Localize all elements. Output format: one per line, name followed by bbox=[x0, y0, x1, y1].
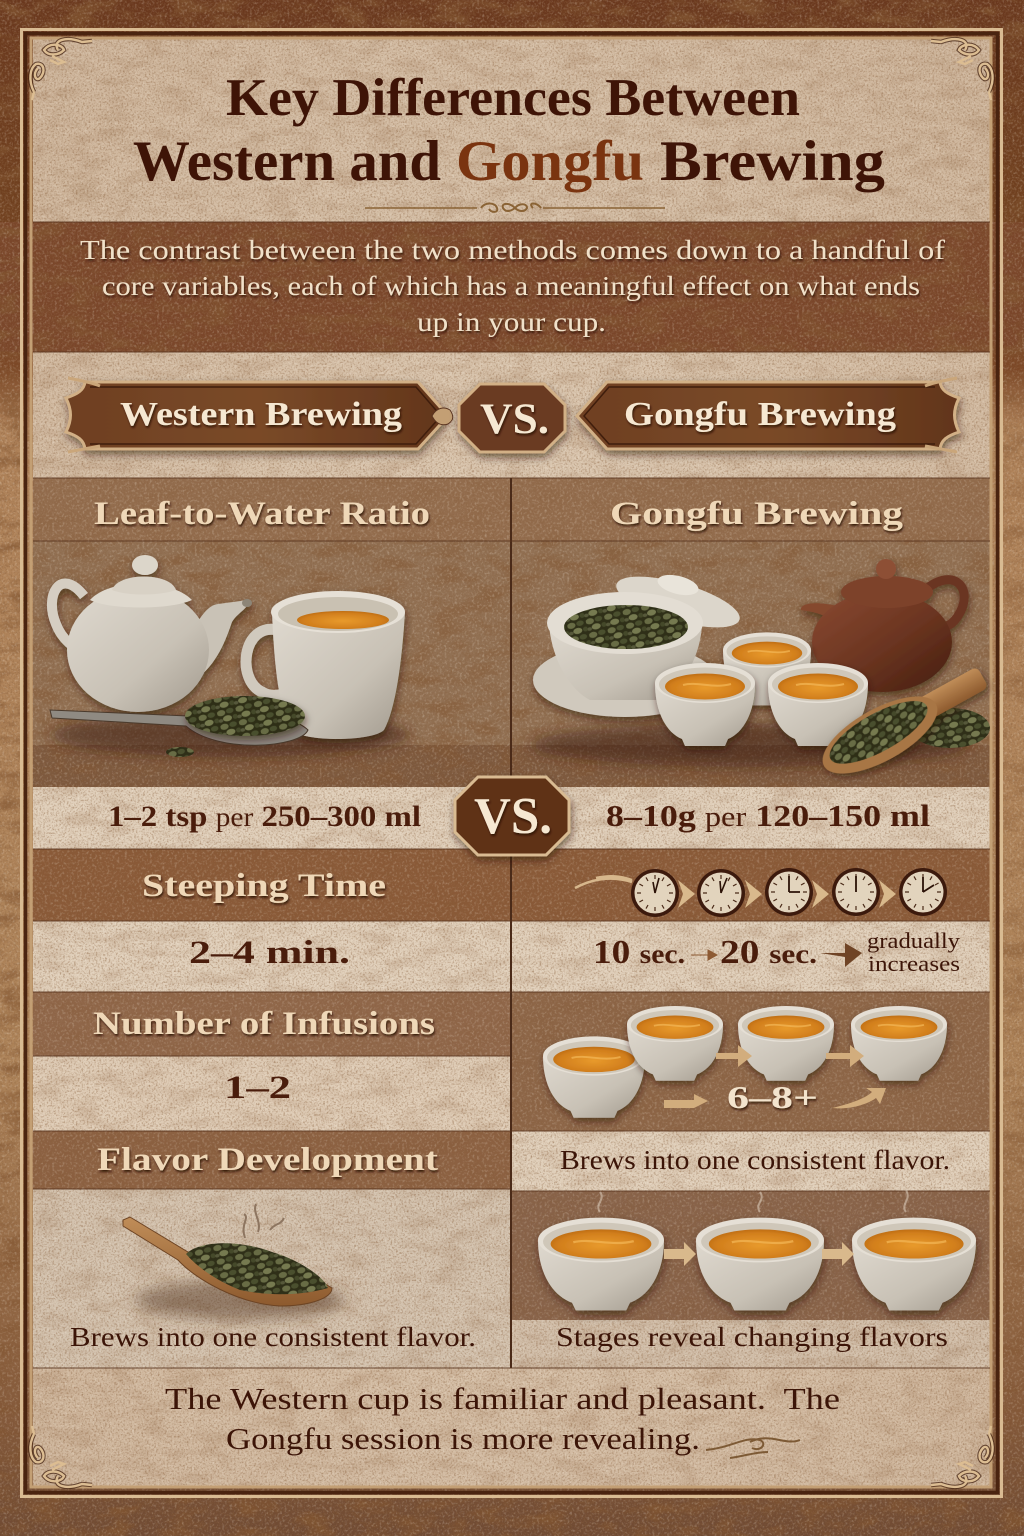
value: Western steeping time: 2–4 min. bbox=[189, 935, 350, 971]
panel: intro band bbox=[0, 222, 1024, 352]
heading: Flavor Development: Flavor Development bbox=[97, 1142, 438, 1178]
title: Key Differences Between bbox=[226, 69, 800, 127]
icon: stage cup 2 bbox=[696, 1218, 824, 1311]
icon: corner ornament top left bbox=[30, 39, 92, 100]
panel: Gongfu flavor stages image bbox=[511, 1191, 990, 1320]
closing statement: The Western cup is familiar and pleasant. The bbox=[165, 1381, 840, 1416]
banner: VS badge top bbox=[459, 384, 565, 452]
icon: front left tea cup bbox=[655, 663, 755, 746]
panel: Gongfu leaf ratio header bbox=[511, 478, 990, 541]
texture: left surround rust bbox=[0, 36, 22, 1500]
icon: cup 3 bbox=[738, 1006, 834, 1081]
panel: steeping time header row bbox=[33, 849, 990, 921]
text: stages caption: Stages reveal changing flavors bbox=[556, 1322, 948, 1352]
arrows: cup progression bbox=[664, 1045, 886, 1108]
badge: VS centre: VS. bbox=[474, 788, 552, 845]
icon: clock 1 bbox=[631, 869, 679, 917]
icon: corner ornament bottom right bbox=[931, 1426, 993, 1487]
title: Gongfu bbox=[456, 130, 644, 193]
value: Gongfu ratio: 8–10g per 120–150 ml bbox=[606, 798, 930, 833]
intro text bbox=[80, 235, 945, 337]
panel: table shadow bbox=[33, 745, 990, 787]
icon: white teapot bbox=[52, 555, 252, 712]
divider: centre column rule bbox=[510, 478, 512, 1368]
divider: row rules bbox=[33, 222, 990, 1368]
value: Gongfu steeping progression: 10 sec. bbox=[593, 934, 685, 971]
icon: cup 2 bbox=[627, 1006, 723, 1081]
panel: Gongfu stages caption bbox=[511, 1320, 990, 1368]
panel: Western flavor header bbox=[33, 1131, 511, 1189]
illustration: Gongfu infusion cups bbox=[543, 1006, 947, 1118]
intro text: The contrast between the two methods comes down to a handful of bbox=[80, 235, 945, 265]
icon: front right tea cup bbox=[768, 663, 868, 746]
icon: corner ornament top right bbox=[931, 39, 993, 100]
panel: Western infusions header bbox=[33, 992, 511, 1056]
icon: corner ornament bottom left bbox=[30, 1426, 92, 1487]
arrow: 20 sec to gradually bbox=[820, 943, 862, 967]
icon: clay teapot bbox=[801, 559, 964, 692]
banner: Western Brewing: Western Brewing bbox=[120, 396, 402, 433]
banner: Western Brewing bbox=[66, 378, 453, 452]
icon: gaiwan bowl with leaves bbox=[547, 592, 703, 700]
intro text: up in your cup. bbox=[417, 307, 606, 337]
illustration: Gongfu flavor stages bbox=[538, 1190, 976, 1311]
icon: title flourish bbox=[365, 204, 665, 212]
icon: clock 5 bbox=[899, 868, 947, 916]
texture: image area mottling bbox=[33, 541, 990, 787]
texture: soft light blotches bbox=[33, 38, 990, 222]
title bbox=[133, 69, 885, 193]
title: Western and bbox=[133, 130, 441, 193]
panel: Gongfu infusions image bbox=[511, 992, 990, 1131]
heading: Number of Infusions: Number of Infusions bbox=[93, 1006, 435, 1042]
texture: intro band rust mottling bbox=[0, 222, 1024, 352]
icon: motion swoosh bbox=[575, 876, 632, 888]
arrows: stage progression bbox=[664, 1242, 854, 1266]
value: Gongfu steeping progression: 20 sec. bbox=[720, 934, 817, 971]
icon: gaiwan saucer bbox=[533, 643, 717, 717]
illustration: Western teapot, mug and leaves bbox=[50, 555, 410, 757]
heading: Gongfu Brewing: Gongfu Brewing bbox=[610, 496, 904, 532]
texture: bottom surround rust bbox=[0, 1498, 1024, 1536]
arrow: 10 to 20 sec bbox=[691, 950, 717, 960]
illustration: Western scoop with leaves bbox=[123, 1204, 345, 1320]
texture: top surround rust bbox=[0, 0, 1024, 36]
badge: VS centre bbox=[455, 777, 569, 855]
icon: back tea cup bbox=[723, 632, 811, 705]
heading: Leaf-to-Water Ratio: Leaf-to-Water Ratio bbox=[94, 496, 430, 532]
illustration: Gongfu gaiwan, cups, clay pot and scoop bbox=[530, 559, 996, 789]
icon: clock 4 bbox=[832, 868, 880, 916]
panel: Western infusions value bbox=[33, 1056, 511, 1131]
icon: clock 3 bbox=[765, 868, 813, 916]
closing statement: Gongfu session is more revealing. bbox=[226, 1421, 700, 1456]
value: 6–8+ infusions: 6–8+ bbox=[727, 1079, 818, 1115]
panel: Gongfu flavor text row bbox=[511, 1131, 990, 1191]
value: Western ratio: 1–2 tsp per 250–300 ml bbox=[108, 800, 421, 833]
intro text: core variables, each of which has a meaningful effect on what ends bbox=[102, 271, 920, 301]
title: Brewing bbox=[660, 130, 885, 193]
icon: arrows between clocks bbox=[678, 880, 896, 908]
text: Western flavor statement: Brews into one consistent flavor. bbox=[70, 1322, 476, 1352]
value: Gongfu steeping progression bbox=[593, 928, 960, 976]
icon: closing flourish bbox=[706, 1438, 800, 1458]
panel: Western leaf ratio header bbox=[33, 478, 511, 541]
text: Gongfu flavor statement: Brews into one consistent flavor. bbox=[560, 1145, 950, 1175]
closing statement bbox=[165, 1381, 840, 1456]
panel: tableware image backdrop bbox=[33, 541, 990, 787]
panel: Western flavor body bbox=[33, 1189, 511, 1368]
icon: white mug with tea bbox=[246, 591, 405, 739]
value: Gongfu steeping progression: increases bbox=[868, 951, 960, 976]
value: Gongfu steeping progression: gradually bbox=[867, 928, 960, 953]
chart: clock sequence bbox=[575, 868, 947, 917]
value: Western infusions: 1–2 bbox=[224, 1070, 291, 1106]
banner: VS badge top: VS. bbox=[480, 396, 549, 443]
icon: cup 1 bbox=[543, 1036, 645, 1118]
icon: clock 2 bbox=[697, 869, 745, 917]
panel: steeping values row bbox=[33, 921, 990, 992]
icon: stage cup 1 bbox=[538, 1218, 664, 1311]
icon: cup 4 bbox=[851, 1006, 947, 1081]
icon: stage cup 3 bbox=[852, 1218, 976, 1311]
icon: steam above cups bbox=[598, 1190, 908, 1212]
heading: Steeping Time: Steeping Time bbox=[142, 868, 386, 904]
icon: gaiwan lid bbox=[611, 566, 745, 638]
texture: right surround rust bbox=[1003, 36, 1024, 1500]
icon: wooden scoop with leaves bbox=[811, 655, 996, 789]
banner: Gongfu Brewing bbox=[577, 378, 959, 452]
banner: Gongfu Brewing: Gongfu Brewing bbox=[624, 396, 896, 433]
icon: spoon with rolled leaves bbox=[50, 696, 308, 757]
panel: ratio values row bbox=[33, 787, 990, 849]
